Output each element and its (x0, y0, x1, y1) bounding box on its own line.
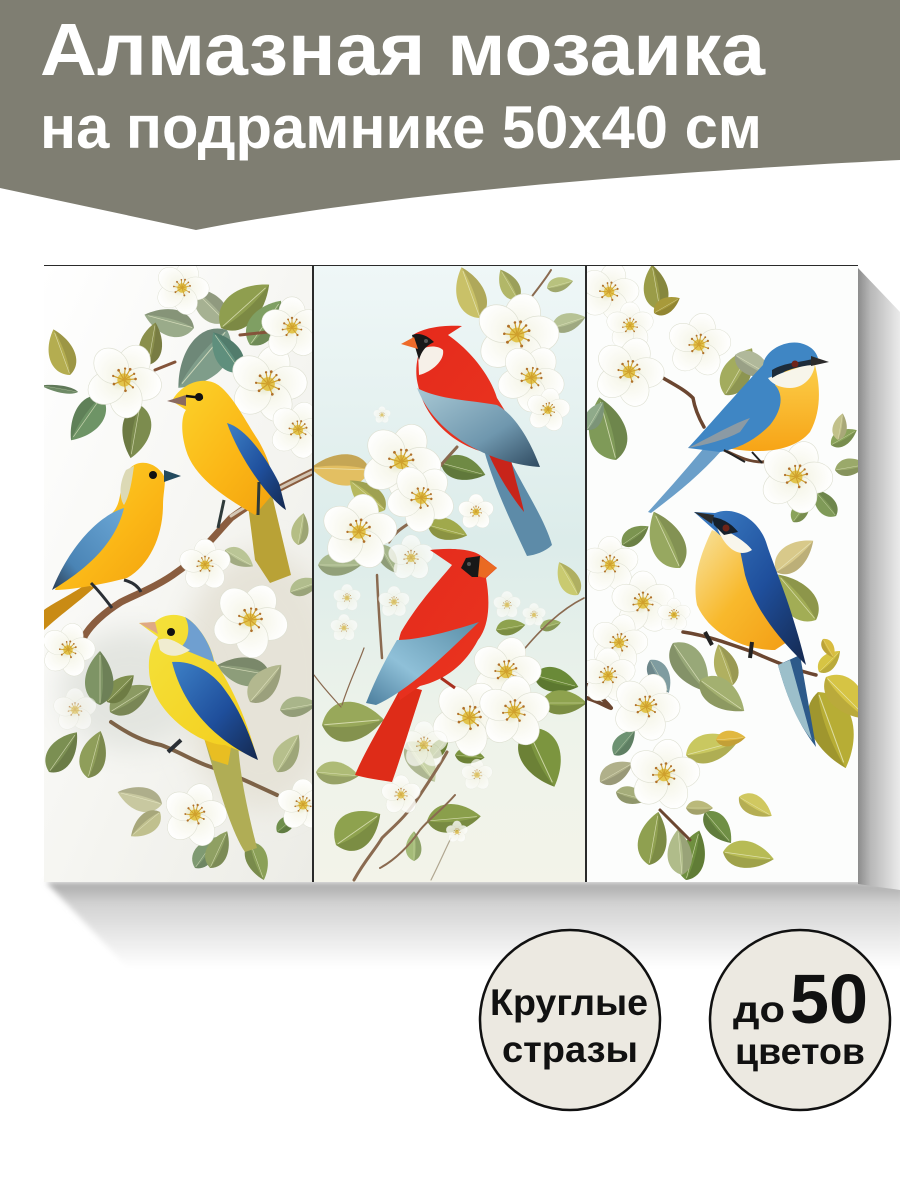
bird: bottom yellow (139, 615, 258, 852)
badge: round rhinestones (480, 930, 660, 1110)
badge: round rhinestones: стразы (502, 1029, 638, 1070)
bird: top cardinal (401, 326, 552, 556)
bird: left yellow (44, 463, 181, 630)
title: Алмазная мозаика (40, 8, 766, 91)
panel: red cardinals (310, 263, 588, 882)
bird: upper blue tit (648, 342, 829, 513)
badge: up to 50 colours: 50 (790, 960, 868, 1038)
canvas triptych (32, 252, 880, 884)
badge: up to 50 colours: до (733, 989, 785, 1030)
panel: blue tits (587, 266, 858, 882)
header banner (0, 0, 900, 230)
bird: lower blue tit (694, 511, 816, 747)
canvas drop shadow (46, 268, 900, 968)
subtitle: на подрамнике 50х40 см (40, 94, 762, 161)
badge: up to 50 colours: цветов (735, 1031, 865, 1072)
badge: round rhinestones: Круглые (490, 982, 648, 1023)
branches (84, 332, 312, 795)
panel: yellow birds (44, 266, 312, 882)
bird: bottom cardinal (355, 549, 497, 782)
bird: top yellow (167, 381, 291, 583)
badge: up to 50 colours (710, 930, 890, 1110)
